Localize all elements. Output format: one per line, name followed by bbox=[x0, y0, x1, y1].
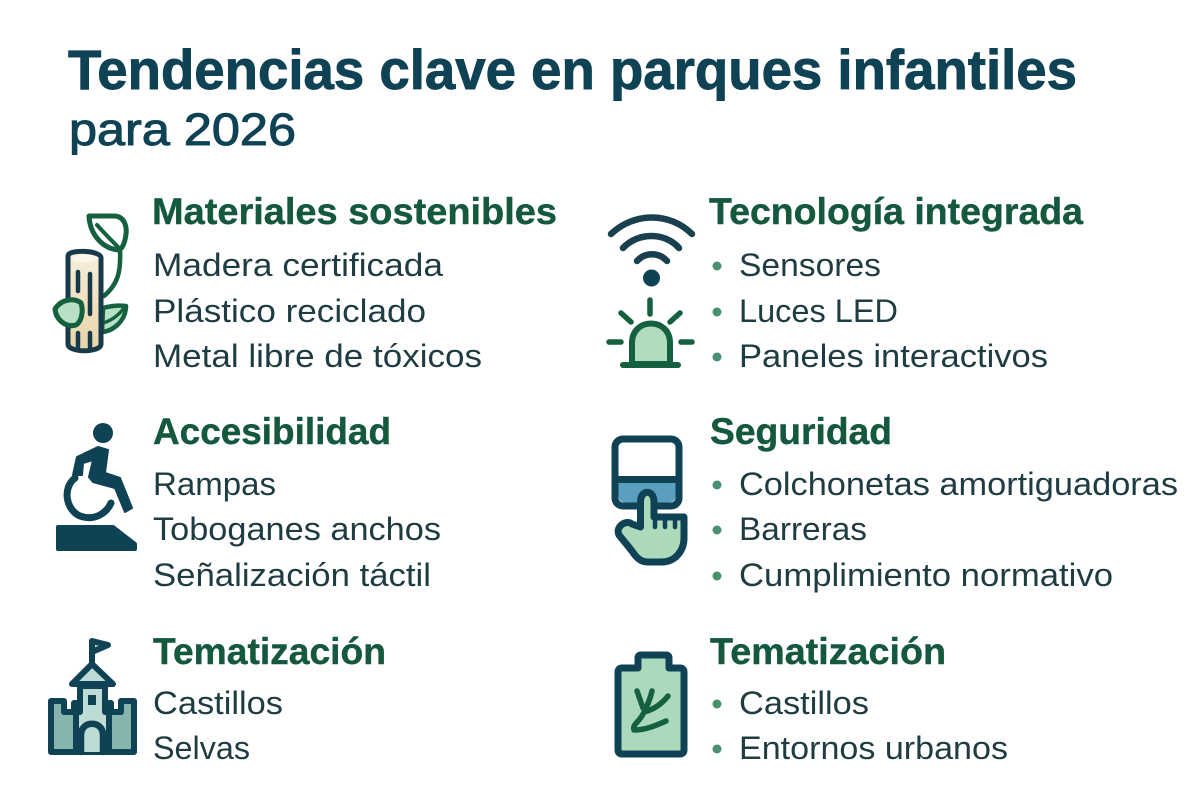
icon: wheelchair on ramp bbox=[58, 423, 135, 549]
heading: Materiales sostenibles bbox=[152, 191, 557, 232]
list: Toboganes anchos bbox=[153, 511, 441, 547]
bulleted list bbox=[712, 247, 1048, 374]
list: Selvas bbox=[153, 730, 250, 766]
list: Plástico reciclado bbox=[153, 293, 426, 329]
icon: castle bbox=[51, 641, 134, 752]
heading: Seguridad bbox=[710, 411, 892, 452]
bulleted list: Entornos urbanos bbox=[739, 730, 1008, 766]
icon: hand pressing button bbox=[615, 439, 684, 562]
panel: tematización castillos y entornos urbanos bbox=[618, 631, 1008, 766]
bulleted list: Paneles interactivos bbox=[739, 338, 1048, 374]
heading: Tematización bbox=[153, 631, 386, 672]
list bbox=[153, 685, 283, 766]
panel: tecnología integrada bbox=[609, 191, 1083, 374]
list: Rampas bbox=[153, 466, 276, 502]
list: Metal libre de tóxicos bbox=[153, 338, 482, 374]
bulleted list: Sensores bbox=[739, 247, 881, 283]
icon: battery with plant bbox=[618, 655, 684, 754]
list: Madera certificada bbox=[153, 247, 444, 283]
heading: Accesibilidad bbox=[153, 411, 391, 452]
title: Tendencias clave en parques infantiles bbox=[68, 38, 1077, 101]
list bbox=[153, 466, 441, 593]
panel: tematización castillos y selvas bbox=[51, 631, 386, 766]
list: Castillos bbox=[153, 685, 283, 721]
heading: Tecnología integrada bbox=[709, 191, 1083, 232]
panel: seguridad bbox=[615, 411, 1178, 593]
bulleted list: Colchonetas amortiguadoras bbox=[739, 466, 1178, 502]
panel: materiales sostenibles bbox=[55, 191, 557, 374]
panel: accesibilidad bbox=[58, 411, 441, 593]
heading: Tematización bbox=[710, 631, 946, 672]
title bbox=[68, 38, 1077, 155]
icon: log with leaves bbox=[55, 216, 126, 351]
subtitle: para 2026 bbox=[69, 104, 296, 155]
list: Señalización táctil bbox=[153, 557, 431, 593]
bulleted list bbox=[712, 685, 1008, 766]
bulleted list: Castillos bbox=[739, 685, 869, 721]
bulleted list: Cumplimiento normativo bbox=[739, 557, 1113, 593]
bulleted list: Luces LED bbox=[739, 293, 898, 329]
bulleted list: Barreras bbox=[739, 511, 867, 547]
icon: wifi and beacon bbox=[609, 218, 692, 365]
list bbox=[153, 247, 482, 374]
bulleted list bbox=[712, 466, 1178, 593]
